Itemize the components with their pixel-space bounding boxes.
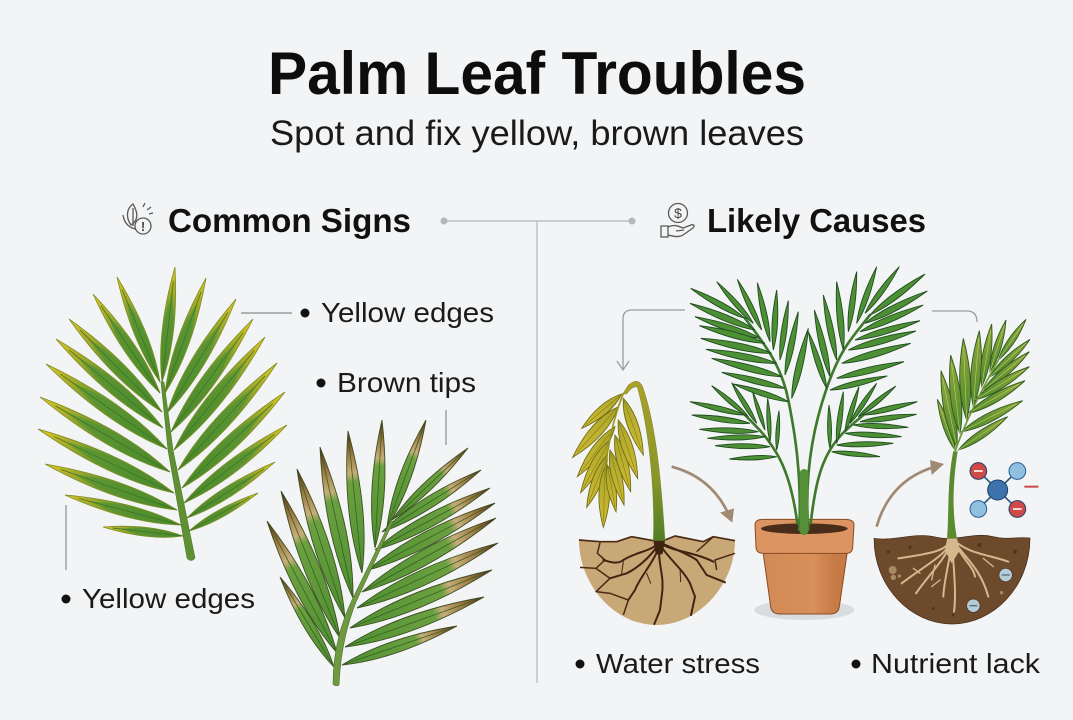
dry soil [579, 536, 735, 625]
brown-tipped palm leaf [261, 418, 501, 686]
soil specks [887, 543, 1017, 616]
label: brown tips: Brown tips [337, 367, 476, 398]
label: nutrient lack: Nutrient lack [871, 648, 1041, 679]
stem [947, 452, 957, 538]
label lines for yellow edges [66, 313, 292, 570]
icon: leaf warning [123, 203, 153, 234]
subtitle: Spot and fix yellow, brown leaves [270, 114, 804, 153]
title: Palm Leaf Troubles [268, 40, 806, 107]
molecule icon [970, 463, 1038, 517]
heading: common signs: Common Signs [168, 202, 411, 239]
arrow: wilted plant down to soil [672, 467, 734, 523]
lower left frond [689, 382, 781, 461]
poor soil [874, 535, 1030, 624]
pot [755, 519, 854, 614]
wilted stem [623, 381, 665, 541]
soil cracks [579, 536, 735, 615]
healthy potted palm [689, 265, 929, 620]
heading: likely causes: Likely Causes [707, 202, 926, 239]
upper right frond [806, 265, 929, 393]
label: yellow edges (right): Yellow edges [321, 297, 494, 328]
upper left frond [689, 278, 811, 404]
pot shadow [754, 600, 854, 620]
header connector and divider [440, 218, 636, 683]
label: brown tips [316, 367, 476, 445]
icon: leaf warning: ! [141, 219, 145, 234]
roots [898, 537, 1008, 612]
soil pebbles [889, 566, 1003, 594]
stems [745, 315, 870, 531]
negative ions [967, 568, 1012, 612]
bracket line to nutrient lack [932, 311, 977, 322]
label: water stress: Water stress [596, 648, 760, 679]
lower right frond [827, 382, 918, 459]
roots [603, 541, 725, 624]
wilted plant in dry soil [568, 381, 735, 625]
yellowing plant in poor soil [874, 318, 1038, 624]
wilted frond [568, 391, 648, 527]
arrow: soil up to plant [877, 460, 944, 527]
icon: hand with coin [661, 204, 694, 237]
yellow-edged palm leaf [35, 266, 291, 560]
frond [934, 318, 1032, 453]
bracket arrow to water stress [617, 310, 685, 370]
label: yellow edges (left): Yellow edges [82, 583, 255, 614]
icon: hand with coin: $ [674, 205, 682, 221]
